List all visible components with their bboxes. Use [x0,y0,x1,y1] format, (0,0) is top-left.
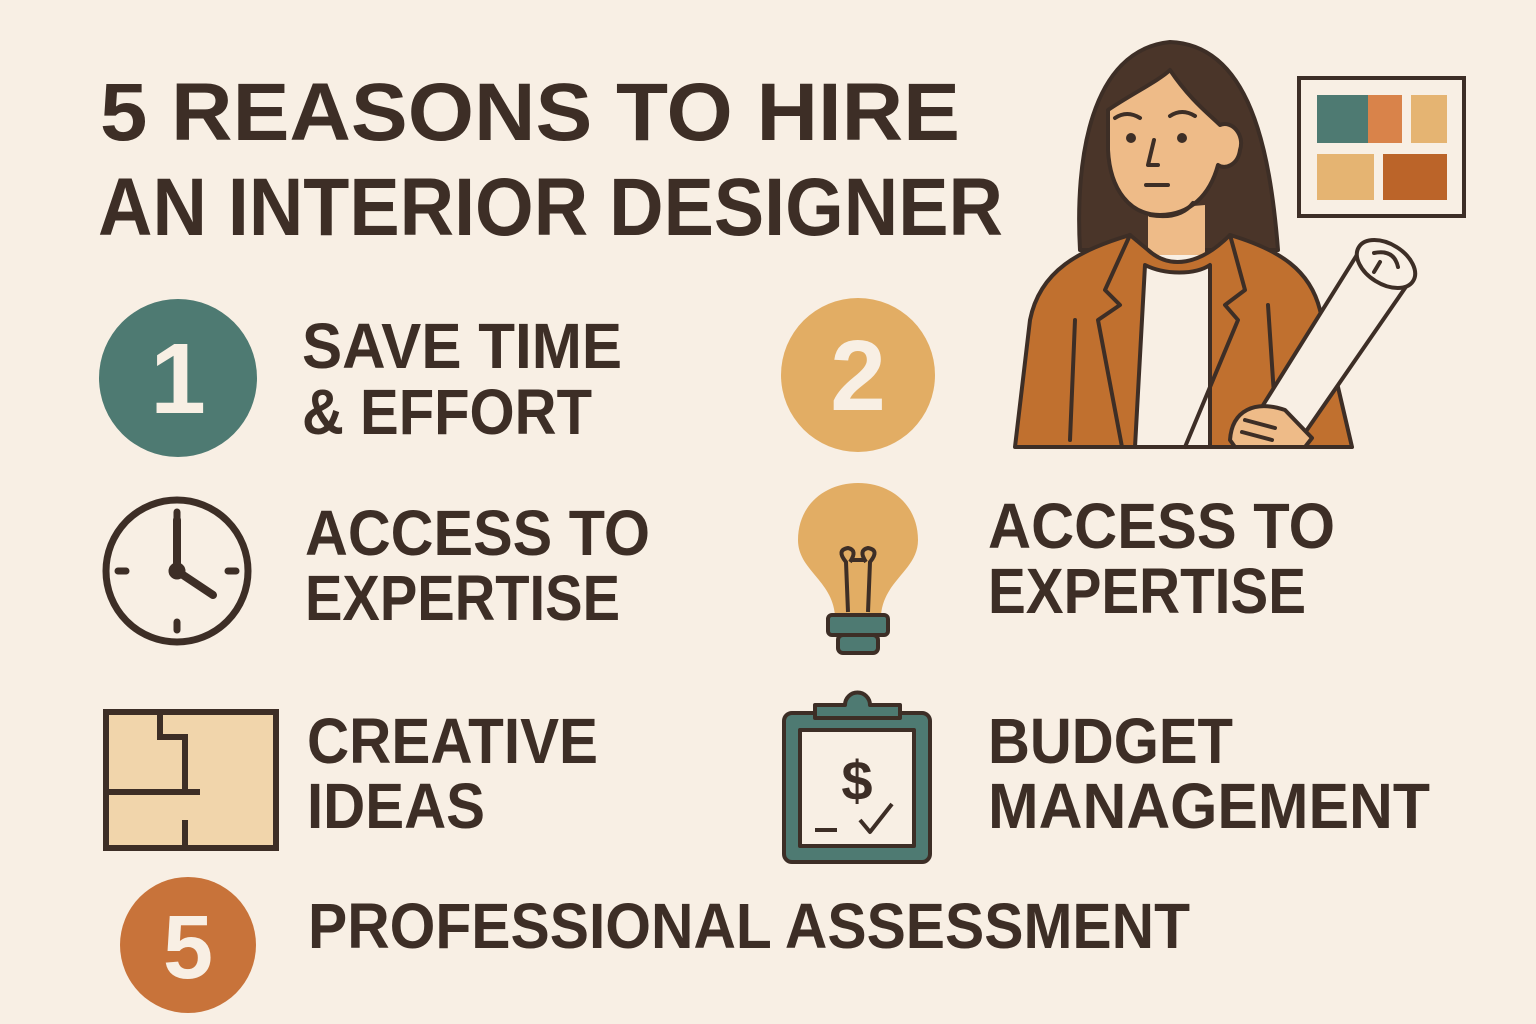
text: save time & effort: SAVE TIME [302,310,622,382]
title: AN INTERIOR DESIGNER [98,162,1003,253]
text: professional assessment: PROFESSIONAL ASSESSMENT [308,890,1190,962]
text: budget management [988,705,1430,842]
badge 1: 1 [150,323,206,435]
text: creative ideas: IDEAS [307,770,485,842]
text: budget management: MANAGEMENT [988,770,1430,842]
icon: clipboard budget [784,692,930,862]
text: creative ideas: CREATIVE [307,705,598,777]
title [98,67,1003,253]
badge 5: 5 [163,898,213,998]
icon: light bulb [798,483,918,653]
text: access to expertise (left) [305,497,650,634]
icon: clipboard budget: $ [841,749,873,812]
text: creative ideas [307,705,598,842]
badge 5 [120,877,256,1013]
text: budget management: BUDGET [988,705,1233,777]
badge 2: 2 [830,320,886,432]
text: access to expertise (left): ACCESS TO [305,497,650,569]
illustration: designer woman [1015,42,1424,447]
text: access to expertise (right): ACCESS TO [988,490,1335,562]
icon: color palette board [1299,78,1464,216]
text: save time & effort: & EFFORT [302,376,592,448]
text: access to expertise (right): EXPERTISE [988,555,1306,627]
icon: floor plan [106,712,276,848]
title: 5 REASONS TO HIRE [100,67,960,158]
badge 2 [781,298,935,452]
icon: clock [106,500,248,642]
text: save time & effort [302,310,622,448]
text: access to expertise (right) [988,490,1335,627]
badge 1 [99,299,257,457]
text: access to expertise (left): EXPERTISE [305,562,620,634]
